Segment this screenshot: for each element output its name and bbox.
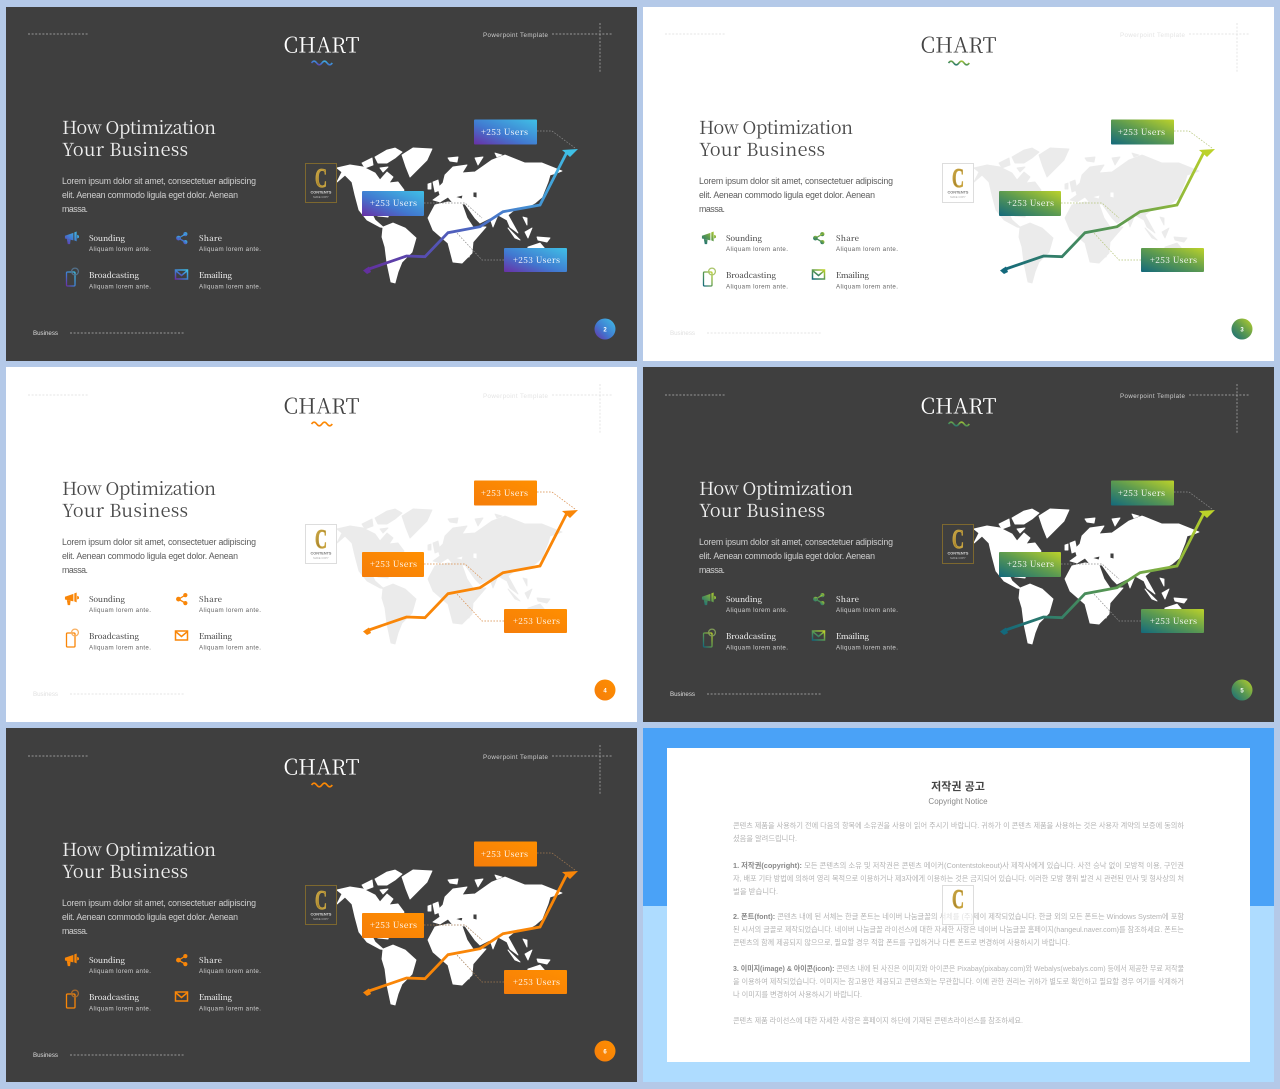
footer label: Business — [670, 330, 695, 337]
icon: mail — [176, 270, 188, 279]
page number — [594, 1040, 616, 1062]
feature list — [65, 231, 261, 290]
icon: phone — [704, 268, 715, 286]
feature captions: Aliquam lorem ante. — [89, 1006, 151, 1012]
logo — [942, 163, 974, 202]
callouts: +253 Users — [1150, 254, 1197, 266]
feature labels — [89, 233, 233, 281]
body text: Lorem ipsum dolor sit amet, consectetuer adipiscing — [62, 537, 256, 547]
icon: share — [813, 593, 824, 605]
body text — [62, 537, 256, 575]
body text: Lorem ipsum dolor sit amet, consectetuer adipiscing — [699, 537, 893, 547]
copyright body text: 콘텐츠 제품 라이선스에 대한 자세한 사항은 홈페이지 하단에 기재된 콘텐츠라이선스를 참조하세요. — [733, 1016, 1023, 1025]
header label: Powerpoint Template — [483, 32, 549, 39]
copyright title: 저작권 공고 — [931, 779, 985, 793]
feature captions: Aliquam lorem ante. — [89, 284, 151, 290]
title wave — [312, 61, 332, 65]
heading: Your Business — [699, 136, 825, 162]
logo — [306, 524, 336, 564]
callouts: +253 Users — [1007, 558, 1054, 570]
heading: How Optimization — [699, 475, 853, 501]
logo: MAKE COPY — [313, 195, 329, 199]
page number: 5 — [1240, 688, 1244, 694]
feature labels: Sounding — [726, 594, 763, 605]
body text: Lorem ipsum dolor sit amet, consectetuer adipiscing — [699, 176, 893, 186]
feature labels: Share — [836, 233, 859, 244]
callouts: +253 Users — [513, 254, 560, 266]
logo: C — [315, 163, 327, 193]
icon: megaphone — [65, 592, 79, 605]
header label: Powerpoint Template — [483, 754, 549, 761]
body text: massa. — [62, 926, 88, 936]
title wave — [948, 422, 969, 426]
logo: MAKE COPY — [313, 556, 329, 560]
callouts — [362, 120, 567, 272]
feature labels: Emailing — [199, 631, 233, 642]
body text — [699, 176, 893, 214]
body text — [62, 176, 256, 214]
icon: share — [176, 593, 187, 605]
logo — [942, 524, 974, 564]
feature captions: Aliquam lorem ante. — [836, 644, 898, 652]
callouts — [999, 480, 1204, 633]
world map — [974, 148, 1199, 283]
feature captions: Aliquam lorem ante. — [836, 246, 898, 253]
icon: phone — [66, 268, 78, 286]
copyright body text: 콘텐츠의 함께 제공되지 않으므로, 필요할 경우 적합 폰트를 구입하거나 다른 폰트로 변경하여 사용하시기 바랍니다. — [733, 938, 1070, 947]
footer label: Business — [33, 330, 58, 337]
title: CHART — [920, 390, 997, 420]
feature list — [65, 953, 261, 1012]
logo: CONTENTS — [311, 912, 332, 916]
header label: Powerpoint Template — [1120, 32, 1186, 39]
title: CHART — [920, 30, 997, 60]
title wave — [948, 61, 969, 65]
panel: dark blue slide — [6, 7, 637, 361]
feature captions — [89, 968, 261, 1012]
icon: mail — [176, 631, 188, 640]
feature labels: Broadcasting — [726, 270, 777, 281]
callouts: +253 Users — [513, 976, 560, 988]
feature labels: Emailing — [199, 270, 233, 281]
feature labels — [726, 594, 870, 642]
icon: phone — [704, 629, 715, 647]
heading: How Optimization — [62, 114, 216, 140]
feature captions: Aliquam lorem ante. — [726, 246, 788, 253]
page number: 2 — [603, 328, 607, 334]
logo: C — [315, 885, 327, 915]
feature labels — [726, 233, 870, 281]
body text: massa. — [699, 204, 725, 214]
feature labels: Emailing — [199, 992, 233, 1003]
logo: CONTENTS — [948, 552, 969, 556]
feature captions: Aliquam lorem ante. — [89, 246, 151, 253]
copyright body text: 콘텐츠 제품을 사용하기 전에 다음의 항목에 소유권을 사용이 읽어 주시기 바랍니다. 귀하가 이 콘텐츠 제품을 사용하는 것은 사용자 계약의 보증에 동의하 — [733, 821, 1184, 830]
page number — [1232, 318, 1252, 340]
icon: megaphone — [702, 592, 716, 605]
callouts: +253 Users — [513, 615, 560, 627]
world map — [974, 509, 1199, 644]
copyright body text: 셨음을 알려드립니다. — [733, 834, 797, 843]
panel: dark green slide — [643, 367, 1274, 722]
logo: C — [952, 163, 964, 193]
title: CHART — [284, 390, 360, 420]
heading — [699, 475, 853, 523]
icon: share — [813, 232, 824, 244]
connector lines — [424, 492, 575, 621]
feature captions: Aliquam lorem ante. — [89, 968, 151, 975]
icon: phone — [66, 629, 78, 647]
callouts — [999, 120, 1204, 272]
copyright subtitle: Copyright Notice — [928, 797, 988, 806]
icon: phone — [66, 990, 78, 1008]
feature labels: Share — [199, 594, 222, 605]
header label: Powerpoint Template — [1120, 393, 1186, 400]
feature captions: Aliquam lorem ante. — [836, 607, 898, 614]
panel: copyright notice — [643, 728, 1274, 1082]
body text: elit. Aenean commodo ligula eget dolor. Aenean — [62, 190, 238, 200]
feature captions: Aliquam lorem ante. — [89, 644, 151, 652]
feature list — [702, 592, 898, 652]
copyright body text: 자, 배포 기타 방법에 의하여 영리 목적으로 이용하거나 제3자에게 이용하는 것은 금지되어 있습니다. 이러한 모방 행위 발견 시 관련된 민사 및 형사상의 처 — [733, 874, 1184, 883]
growth arrow — [1000, 149, 1215, 274]
feature list — [702, 231, 898, 290]
logo: MAKE COPY — [313, 917, 329, 921]
logo — [306, 885, 336, 924]
callouts: +253 Users — [370, 197, 417, 209]
feature captions: Aliquam lorem ante. — [726, 644, 788, 652]
header label: Powerpoint Template — [483, 393, 549, 400]
icon: mail — [812, 631, 824, 640]
feature labels: Broadcasting — [89, 270, 140, 281]
body text — [699, 537, 893, 575]
logo: MAKE COPY — [950, 556, 966, 560]
page number: 3 — [1240, 328, 1244, 334]
heading: Your Business — [699, 497, 825, 523]
feature captions — [726, 607, 898, 652]
world map — [337, 148, 562, 283]
feature captions — [89, 246, 261, 290]
feature captions: Aliquam lorem ante. — [199, 246, 261, 253]
feature labels — [89, 955, 233, 1003]
heading: Your Business — [62, 858, 188, 884]
feature labels: Broadcasting — [89, 992, 140, 1003]
callouts: +253 Users — [370, 558, 417, 570]
icon: mail — [176, 992, 188, 1001]
icon: megaphone — [65, 953, 79, 966]
callouts: +253 Users — [481, 126, 528, 138]
world map — [337, 509, 562, 644]
feature labels: Share — [836, 594, 859, 605]
feature captions — [89, 607, 261, 652]
copyright body text: 나 이미지를 변경하여 사용하시기 바랍니다. — [733, 990, 862, 999]
icon: megaphone — [65, 231, 79, 244]
copyright body text: 2. 폰트(font): 콘텐츠 내에 된 서체는 한글 폰트는 네이버 나눔글꼴의 서체를 (주)제이 제작되었습니다. 한글 외의 모든 폰트는 Windows System에 포함 — [733, 912, 1184, 921]
feature labels: Emailing — [836, 631, 870, 642]
page number: 4 — [603, 688, 607, 694]
feature captions: Aliquam lorem ante. — [726, 607, 788, 614]
feature labels — [89, 594, 233, 642]
logo: CONTENTS — [311, 552, 332, 556]
feature captions — [726, 246, 898, 290]
body text: elit. Aenean commodo ligula eget dolor. Aenean — [62, 551, 238, 561]
page number — [594, 318, 616, 340]
body text: elit. Aenean commodo ligula eget dolor. Aenean — [62, 912, 238, 922]
callouts — [362, 842, 567, 994]
callouts: +253 Users — [1118, 126, 1165, 138]
callouts: +253 Users — [1118, 487, 1165, 499]
copyright body text: 1. 저작권(copyright): 모든 콘텐츠의 소유 및 저작권은 콘텐츠 메이커(Contentstokeout)사 제작사에게 있습니다. 사전 승낙 없이 모방적 이용, 구인권 — [733, 861, 1184, 870]
feature labels: Sounding — [89, 233, 126, 244]
callouts: +253 Users — [1007, 197, 1054, 209]
heading: How Optimization — [699, 114, 853, 140]
logo — [942, 884, 974, 924]
body text: massa. — [699, 565, 725, 575]
footer label: Business — [33, 691, 58, 698]
heading — [699, 114, 853, 162]
callouts: +253 Users — [1150, 615, 1197, 627]
logo — [306, 163, 336, 202]
growth arrow — [363, 149, 578, 274]
copyright body text: 3. 이미지(image) & 아이콘(icon): 콘텐츠 내에 된 사진은 이미지와 아이콘은 Pixabay(pixabay.com)와 Webalys(webalys.com) 등에서 제공한 무료 저작물 — [733, 964, 1184, 973]
page number — [594, 680, 616, 700]
growth arrow — [363, 510, 578, 635]
feature labels: Emailing — [836, 270, 870, 281]
body text: elit. Aenean commodo ligula eget dolor. Aenean — [699, 190, 875, 200]
page number: 6 — [603, 1050, 607, 1056]
feature labels: Sounding — [726, 233, 763, 244]
body text — [62, 898, 256, 936]
feature captions: Aliquam lorem ante. — [836, 284, 898, 290]
logo: CONTENTS — [948, 190, 969, 194]
title: CHART — [284, 30, 360, 60]
icon: share — [176, 232, 187, 244]
footer label: Business — [33, 1052, 58, 1059]
callouts — [362, 480, 567, 633]
logo: C — [952, 524, 964, 554]
body text: elit. Aenean commodo ligula eget dolor. Aenean — [699, 551, 875, 561]
feature captions: Aliquam lorem ante. — [199, 607, 261, 614]
logo: MAKE COPY — [950, 195, 966, 199]
world map — [337, 870, 562, 1005]
icon: share — [176, 954, 187, 966]
copyright body text: 벌을 받습니다. — [733, 887, 778, 896]
callouts: +253 Users — [481, 848, 528, 860]
title wave — [312, 783, 332, 787]
page number — [1232, 680, 1252, 700]
callouts: +253 Users — [481, 487, 528, 499]
title: CHART — [284, 752, 360, 782]
heading: Your Business — [62, 136, 188, 162]
panel: white green slide — [643, 7, 1274, 361]
connector lines — [1061, 492, 1212, 621]
feature labels: Share — [199, 955, 222, 966]
feature captions: Aliquam lorem ante. — [199, 968, 261, 975]
body text: Lorem ipsum dolor sit amet, consectetuer adipiscing — [62, 898, 256, 908]
feature captions: Aliquam lorem ante. — [199, 1006, 261, 1012]
feature labels: Broadcasting — [89, 631, 140, 642]
feature labels: Sounding — [89, 594, 126, 605]
growth arrow — [363, 871, 578, 996]
connector lines — [424, 131, 575, 260]
heading — [62, 475, 216, 523]
body text: Lorem ipsum dolor sit amet, consectetuer adipiscing — [62, 176, 256, 186]
feature captions: Aliquam lorem ante. — [199, 644, 261, 652]
icon: mail — [812, 270, 824, 279]
logo: C — [315, 524, 327, 554]
body text: massa. — [62, 204, 88, 214]
copyright body text: 을 이용하여 제작되었습니다. 이미지는 참고용만 제공되고 콘텐츠와는 무관합니다. 이에 관한 권리는 귀하가 별도로 확인하고 필요할 경우 여기를 삭제하거 — [733, 977, 1184, 986]
feature labels: Share — [199, 233, 222, 244]
title wave — [312, 422, 332, 426]
feature list — [65, 592, 261, 652]
callouts: +253 Users — [370, 919, 417, 931]
growth arrow — [1000, 510, 1215, 635]
heading: Your Business — [62, 497, 188, 523]
feature captions: Aliquam lorem ante. — [726, 284, 788, 290]
copyright body text: 된 시서의 글꼴로 제작되었습니다. 네이버 나눔글꼴 라이선스에 대한 자세한 사항은 네이버 나눔글꼴 홈페이지(hangeul.naver.com)를 참조하세요. 폰트는 — [733, 925, 1184, 934]
copyright body text — [733, 821, 1184, 1025]
heading: How Optimization — [62, 475, 216, 501]
heading — [62, 114, 216, 162]
panel: dark orange slide — [6, 728, 637, 1082]
footer label: Business — [670, 691, 695, 698]
feature labels: Broadcasting — [726, 631, 777, 642]
heading: How Optimization — [62, 836, 216, 862]
heading — [62, 836, 216, 884]
feature captions: Aliquam lorem ante. — [89, 607, 151, 614]
panel: white orange slide — [6, 367, 637, 722]
connector lines — [1061, 131, 1212, 260]
logo: CONTENTS — [311, 190, 332, 194]
feature captions: Aliquam lorem ante. — [199, 284, 261, 290]
icon: megaphone — [702, 231, 716, 244]
feature labels: Sounding — [89, 955, 126, 966]
connector lines — [424, 853, 575, 982]
logo: C — [952, 884, 964, 914]
body text: massa. — [62, 565, 88, 575]
